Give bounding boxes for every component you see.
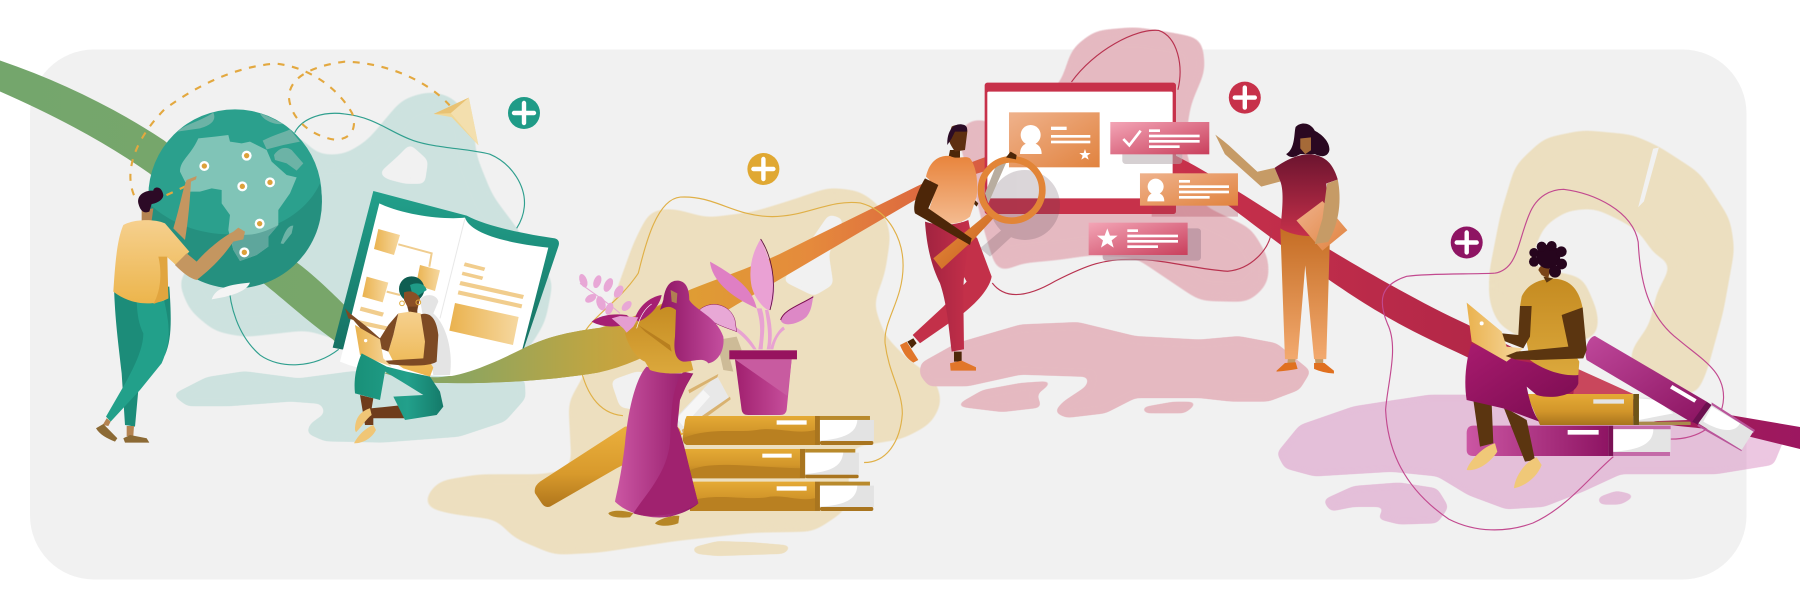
book 2: [678, 449, 859, 478]
face: [404, 291, 420, 310]
blob: pink floor: [920, 322, 1311, 418]
text lines: [458, 262, 524, 308]
back arm: [1502, 306, 1532, 348]
profile card: [1009, 112, 1100, 167]
icon: plus purple: [1451, 226, 1483, 258]
ankles: [907, 338, 962, 362]
blob: gold hole lower: [611, 371, 664, 410]
shoes: [900, 342, 976, 371]
person: reader with laptop: [345, 276, 451, 443]
arm over folder: [1315, 180, 1340, 244]
continent: Africa: [180, 135, 297, 261]
feet: [1467, 443, 1542, 488]
ribbon over book: [427, 328, 599, 383]
icon: plus teal: [508, 97, 540, 129]
far arm: [968, 193, 978, 207]
shirt: [1275, 154, 1338, 236]
blob: gold main: [420, 187, 943, 555]
open book: [333, 191, 559, 376]
thin curve: crimson: [992, 30, 1272, 295]
blob: gold hole upper: [783, 214, 844, 296]
top: [388, 312, 433, 377]
near arm: [914, 178, 972, 245]
ring crack: [1638, 148, 1659, 207]
face: [948, 125, 967, 152]
thin curve: gold: [578, 197, 903, 463]
leaning book: [535, 423, 685, 507]
hijab: [660, 281, 724, 363]
person: woman in hijab: [577, 273, 724, 526]
blob: pink floor small: [1140, 402, 1200, 413]
monitor with cards: [980, 83, 1238, 261]
hair: [138, 188, 163, 212]
shirt: [1520, 279, 1583, 375]
icon: paper plane: [434, 98, 478, 145]
shadow: [420, 295, 451, 375]
neck: [142, 208, 153, 221]
hair: [1529, 241, 1567, 278]
thin curve: magenta: [1382, 189, 1724, 530]
shoes: [96, 424, 149, 443]
hair: [947, 124, 967, 145]
person: man touching globe: [96, 176, 245, 443]
ankles: [1287, 357, 1323, 365]
monitor frame: [985, 83, 1176, 214]
ankles: [103, 418, 134, 436]
ribbon path: [0, 59, 1800, 450]
book stack under seated woman: [1467, 336, 1755, 456]
leaves: [699, 304, 737, 332]
neck: [948, 150, 960, 160]
shirt: [113, 220, 189, 303]
face: [1538, 264, 1550, 278]
dashed flight path: [130, 62, 450, 195]
sprig: [577, 273, 633, 316]
icon: plus gold: [747, 153, 779, 185]
check card: [1110, 122, 1209, 164]
leaning book: [1586, 336, 1755, 451]
person card: [1140, 173, 1238, 217]
blob: teal floor: [172, 371, 526, 443]
blob: teal upper hole: [379, 144, 428, 184]
t-shirt: [926, 156, 977, 224]
person: seated woman with laptop: [1465, 241, 1587, 488]
person: man with magnifier: [900, 124, 1042, 371]
screen: [987, 92, 1173, 198]
shoes: [354, 408, 376, 443]
thin curve: teal: [229, 113, 524, 365]
folder: [1296, 201, 1347, 251]
flowchart: [357, 229, 440, 331]
trousers front leg: [106, 297, 169, 422]
pot: [735, 359, 792, 415]
gold book: [1527, 394, 1691, 425]
magnifier: [933, 152, 1042, 269]
trousers: [355, 353, 443, 420]
raised arm: [173, 176, 197, 240]
forearm: [175, 228, 245, 280]
blob: mauve floor: [1277, 395, 1785, 509]
blob: mauve small: [1322, 482, 1449, 525]
person: woman with folder: [1215, 123, 1347, 374]
laptop: [355, 325, 392, 367]
magnifier shadow: [980, 170, 1060, 257]
front leg: [925, 220, 972, 352]
red book: [1573, 368, 1633, 394]
stems: [733, 308, 785, 349]
globe: [148, 109, 322, 299]
hair and headband: [399, 276, 424, 302]
blob: teal upper: [178, 91, 553, 354]
star card: [1089, 223, 1201, 261]
dark leaves: [592, 314, 633, 326]
feet: [608, 511, 679, 526]
book 3: [690, 482, 874, 511]
skirt: [1465, 343, 1578, 422]
trousers: [1280, 228, 1330, 359]
blob: pink upper: [960, 27, 1269, 302]
continents: other: [177, 113, 303, 244]
shoes: [1277, 362, 1334, 374]
face: [671, 290, 677, 303]
laptop: [1467, 303, 1523, 362]
neck: [1543, 277, 1553, 283]
blob: gold small: [690, 541, 793, 556]
hand: [612, 316, 638, 333]
coat: [625, 304, 693, 373]
face: [1300, 137, 1311, 154]
front arm: [1506, 307, 1587, 360]
pale blob below globe: [212, 283, 250, 299]
pages: [340, 203, 548, 376]
blob: Africa-shaped gold ring: [1489, 130, 1735, 397]
pointing arm: [1215, 135, 1280, 187]
cover: [333, 191, 559, 355]
arms: [382, 314, 438, 366]
map pins: [199, 151, 275, 257]
blob: mauve tiny: [1597, 491, 1637, 505]
image block: [449, 303, 519, 345]
legs: [1473, 400, 1535, 462]
book 1: [683, 416, 874, 445]
icon: plus red: [1229, 82, 1261, 114]
hair: [1286, 123, 1329, 157]
blob: pink floor lower: [954, 381, 1055, 412]
book stack and leaning book: [535, 374, 874, 511]
magenta book: [1467, 426, 1671, 456]
legs: [360, 395, 405, 425]
trousers back leg: [114, 287, 171, 427]
back leg: [913, 222, 992, 343]
potted plant: [699, 239, 813, 415]
southern Africa shade: [230, 225, 278, 261]
plant shadow: [717, 337, 742, 372]
dress: [615, 367, 698, 517]
